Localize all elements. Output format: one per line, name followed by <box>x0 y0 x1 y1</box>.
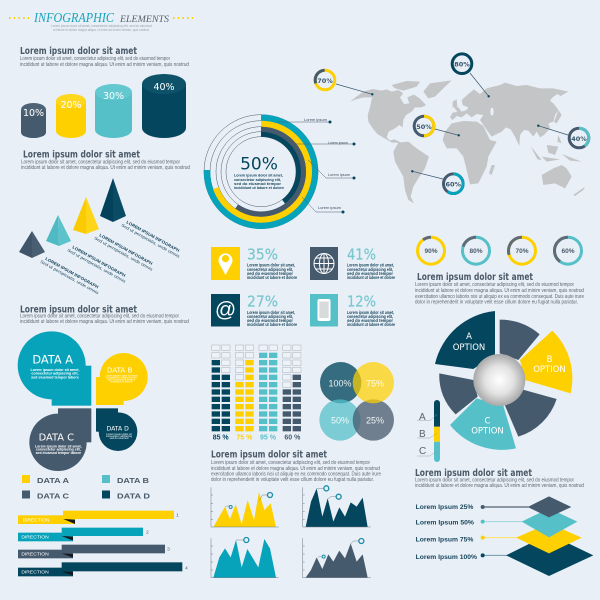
stat tile: phone 12%: 12% <box>347 292 376 310</box>
stat tile: at sign 27%: sed do eiusmod tempor <box>247 318 293 323</box>
radial chart callouts: Lorem ipsum <box>318 206 341 210</box>
stat tile: globe 41%: incididunt ut labore et dolore <box>347 275 396 280</box>
stat tile: at sign 27%: 27% <box>247 292 278 310</box>
text block: layers heading: Lorem ipsum dolor sit amet <box>415 468 532 479</box>
text block: pyramids heading: incididunt ut labore et dolore magna aliqua. Ut enim ad minim veniam, quis nostrud <box>21 165 190 171</box>
bar 4: DIRECTION <box>21 570 49 575</box>
text block: pie heading: dolor in reprehenderit in voluptate velit esse cillum dolore eu fugiat nulla pariatur. <box>415 300 578 306</box>
map pins <box>312 54 589 194</box>
cylinder chart: 40% <box>153 82 175 93</box>
cylinder chart: 30% <box>103 91 124 102</box>
world map <box>350 80 585 203</box>
pin: 40%: 40% <box>571 135 587 143</box>
pin: 80% <box>452 54 472 74</box>
stat tile: globe 41%: sed do eiusmod tempor <box>347 271 393 276</box>
area chart: yellow <box>211 487 279 527</box>
pin: 80%: 80% <box>454 60 470 68</box>
pie legend <box>417 400 440 462</box>
waffle bar chart: 60 % <box>284 435 301 442</box>
segmented pie chart: B <box>547 355 553 365</box>
stat tile: location 35% <box>211 246 298 280</box>
text block: area charts heading: dolor in reprehenderit in voluptate velit esse cillum dolore eu fugiat nulla pariatur. <box>211 477 374 483</box>
text block: area charts heading: Lorem ipsum dolor sit amet, consectetur adipiscing elit, sed do eiusmod tempor <box>211 460 370 466</box>
icon: map pin <box>218 253 232 275</box>
waffle bar chart: 95 % <box>260 435 277 442</box>
bar 2: DIRECTION <box>21 535 49 540</box>
venn diagram: 25% <box>366 416 384 426</box>
bar 2 <box>18 528 149 541</box>
title <box>9 10 193 32</box>
petal: data B <box>96 353 148 405</box>
radial chart callouts: Lorem ipsum <box>328 141 348 145</box>
stat tile: phone 12%: Lorem ipsum dolor sit amet, <box>347 310 394 315</box>
text block: cylinders heading: incididunt ut labore et dolore magna aliqua. Ut enim ad minim veniam, quis nostrud <box>20 62 189 68</box>
waffle bar chart <box>212 345 301 442</box>
data legend: DATA A <box>37 476 70 485</box>
pyramid chart <box>19 178 183 295</box>
text block: cylinders heading: Lorem ipsum dolor sit amet, consectetur adipiscing elit, sed do eiusmod tempor <box>20 56 170 62</box>
text block: data heading: incididunt ut labore et dolore magna aliqua. Ut enim ad minim veniam, quis nostrud <box>20 319 189 325</box>
petal: data A: Lorem ipsum dolor sit amet, <box>31 368 79 372</box>
title: INFOGRAPHIC <box>33 10 115 25</box>
waffle bar chart: 85 % <box>213 435 229 442</box>
area charts <box>211 486 371 578</box>
progress rings: 60% <box>561 248 575 255</box>
petal: data B: incididunt ut labore <box>110 380 133 384</box>
title: ELEMENTS <box>119 15 169 25</box>
text block: pyramids heading: Lorem ipsum dolor sit amet, consectetur adipiscing elit, sed do eiusmod tempor <box>21 160 180 166</box>
title: ut labore et dolore magna aliqua. Ut enim ad minim veniam, quis nostrud <box>53 28 149 32</box>
layered diamonds chart: Lorem Ipsum 75% <box>416 537 474 543</box>
layered diamonds chart <box>416 496 593 576</box>
progress rings: 90% <box>424 248 438 255</box>
stat tile: phone 12%: incididunt ut labore et dolore <box>347 322 396 327</box>
radial chart: sed do eiusmod tempor <box>234 182 282 186</box>
bar 4: 4 <box>185 565 188 571</box>
stat tile: at sign 27%: incididunt ut labore et dolore <box>247 322 298 327</box>
petal: data C <box>29 408 91 471</box>
bar 1: DIRECTION <box>23 518 49 523</box>
stat tile: phone 12%: sed do eiusmod tempor <box>347 318 393 323</box>
petal: data D: Lorem ipsum dolor sit <box>106 432 132 436</box>
progress rings: 70% <box>515 248 529 255</box>
segmented pie chart: OPTION <box>533 365 566 375</box>
pyramid captions: LOREM IPSUM INFOGRAPH <box>99 233 153 266</box>
stat tile: at sign 27%: Lorem ipsum dolor sit amet, <box>247 310 295 315</box>
pin: 70% <box>312 67 338 93</box>
pin: 60%: 60% <box>446 180 462 188</box>
stat tile: location 35%: 35% <box>247 246 278 264</box>
petal: data A <box>18 331 91 406</box>
pin: 70%: 70% <box>317 77 333 85</box>
text block: area charts heading <box>211 450 381 483</box>
segmented pie chart: OPTION <box>453 343 485 353</box>
data legend: DATA B <box>117 476 150 485</box>
text block: area charts heading: Lorem ipsum dolor sit amet <box>211 450 327 460</box>
pyramid captions: Sed ut perspiciatis, unde omnis <box>66 247 127 284</box>
petal: data A: DATA A <box>32 353 73 367</box>
stat tile: globe 41%: 41% <box>347 246 376 264</box>
pyramid captions <box>39 218 183 295</box>
venn diagram: 50% <box>331 416 349 426</box>
pin: 50% <box>414 116 434 136</box>
icon: globe <box>314 254 334 274</box>
data legend: DATA D <box>117 492 151 500</box>
column 95% <box>259 353 277 431</box>
stat tile: location 35%: Lorem ipsum dolor sit amet, <box>247 262 295 268</box>
stat tile: location 35%: consectetur adipiscing elit, <box>247 267 293 272</box>
pyramid captions: Sed ut perspiciatis, unde omnis <box>93 235 154 272</box>
text block: data heading: Lorem ipsum dolor sit amet, consectetur adipiscing elit, sed do eiusmod tempor <box>20 314 179 320</box>
title: Lorem ipsum dolor sit amet, consectetur adipiscing elit, sed do eiusmod <box>51 24 152 28</box>
pyramid captions: LOREM IPSUM INFOGRAPH <box>72 245 126 278</box>
stat tile: globe 41% <box>310 246 396 280</box>
empty cells <box>212 345 301 387</box>
layered diamonds chart: Lorem Ipsum 50% <box>416 520 475 526</box>
radial chart: 50% <box>240 154 278 174</box>
sphere hub <box>473 354 525 406</box>
bar 1 <box>18 511 179 524</box>
bar 4 <box>18 562 188 576</box>
stat tile: location 35%: incididunt ut labore et dolore <box>247 275 298 280</box>
text block: pyramids heading: Lorem ipsum dolor sit amet <box>23 150 140 160</box>
data legend: DATA C <box>37 492 70 500</box>
progress rings <box>412 232 587 270</box>
cylinder chart: 20% <box>60 100 82 111</box>
segmented pie chart: C <box>485 416 491 426</box>
bar 3: 3 <box>167 547 170 553</box>
text block: area charts heading: incididunt ut labore et dolore magna aliqua. Ut enim ad minim veniam, quis nostrud <box>211 466 380 472</box>
pyramid captions: LOREM IPSUM INFOGRAPH <box>45 256 99 289</box>
text block: pyramids heading <box>21 150 190 171</box>
venn diagram <box>319 362 394 441</box>
butterfly diagram <box>18 331 148 471</box>
radial chart callouts: Lorem ipsum <box>304 118 327 122</box>
bar 2: 2 <box>146 530 149 536</box>
segmented pie chart: A <box>466 332 472 342</box>
stat tile: phone 12%: consectetur adipiscing elit, <box>347 314 393 319</box>
pin: 50%: 50% <box>416 123 432 131</box>
petal: data B: sed do eiusmod tempor <box>107 378 135 382</box>
waffle bar chart: 75 % <box>236 435 253 442</box>
venn diagram: 75% <box>366 379 384 389</box>
text block: pie heading: exercitation ullamco laboris nisi ut aliquip ex ea commodo consequat. Duis aute irure <box>415 294 584 300</box>
petal: data D: consectetur adipiscing <box>106 434 133 438</box>
segmented pie chart <box>435 311 572 450</box>
pyramid captions: Sed ut perspiciatis, unde omnis <box>120 222 181 259</box>
petal: data C: Lorem ipsum dolor sit amet, <box>35 444 82 448</box>
petal: data A: sed eiusmod tempor labore <box>31 376 79 380</box>
connector lines <box>483 507 528 555</box>
pie legend: C <box>419 446 426 457</box>
radial chart: Lorem ipsum dolor sit amet, <box>234 174 283 178</box>
data legend <box>22 475 151 500</box>
text block: data heading <box>20 304 189 325</box>
cylinder chart <box>21 74 186 138</box>
petal: data B: consectetur adipiscing elit <box>106 376 137 380</box>
petal: data D: DATA D <box>106 426 129 433</box>
area chart: blue <box>211 537 279 578</box>
petal: data D: sed do eiusmod <box>110 436 129 440</box>
petal: data C: DATA C <box>39 433 74 444</box>
text block: pie heading: Lorem ipsum dolor sit amet <box>417 272 533 283</box>
progress rings: 80% <box>469 248 483 255</box>
stat tile: at sign 27%: consectetur adipiscing elit, <box>247 314 293 319</box>
text block: cylinders heading: Lorem ipsum dolor sit amet <box>20 46 137 57</box>
cylinder chart: 10% <box>23 108 44 119</box>
pin: 40% <box>569 128 589 148</box>
radial chart: incididunt ut labore et dolore <box>234 186 284 190</box>
radial chart: consectetur adipiscing elit, <box>234 178 281 182</box>
icon: phone <box>318 299 330 321</box>
pyramid captions: Sed ut perspiciatis, unde omnis <box>39 259 100 295</box>
pyramid captions: LOREM IPSUM INFOGRAPH <box>126 220 180 253</box>
text block: area charts heading: exercitation ullamco laboris nisi ut aliquip ex ea commodo consequat. Duis aute irure <box>211 472 381 478</box>
column 85% <box>212 360 230 431</box>
pie legend: A <box>419 412 426 423</box>
text block: pie heading: Lorem ipsum dolor sit amet, consectetur adipiscing elit, sed do eiusmod tempor <box>415 282 574 288</box>
pin: 60% <box>444 174 463 194</box>
stat tile: location 35%: sed do eiusmod tempor <box>247 271 293 276</box>
petal: data C: consectetur adipiscing elit, <box>36 448 81 452</box>
pie legend: B <box>419 429 426 440</box>
text block: layers heading: Lorem ipsum dolor sit amet, consectetur adipiscing elit, sed do eiusmod tempor <box>415 478 574 484</box>
petal: data B: Lorem ipsum dolor sit amet <box>105 374 138 378</box>
stat tile: globe 41%: Lorem ipsum dolor sit amet, <box>347 262 394 268</box>
text block: layers heading <box>415 468 584 489</box>
area chart: slate <box>303 538 371 578</box>
bar 1: 1 <box>176 513 179 519</box>
petal: data D <box>96 408 137 451</box>
petal: data C: sed eiusmod tempor labore <box>36 451 81 455</box>
column 75% <box>235 360 254 431</box>
radial chart <box>204 115 356 229</box>
layered diamonds chart: Lorem Ipsum 100% <box>416 555 478 561</box>
direction bars <box>18 511 188 576</box>
petal: data A: consectetur adipiscing elit, <box>31 372 79 376</box>
stat tile: globe 41%: consectetur adipiscing elit, <box>347 267 393 272</box>
text block: pie heading: incididunt ut labore et dolore magna aliqua. Ut enim ad minim veniam, quis nostrud <box>415 288 584 294</box>
layered diamonds chart: Lorem Ipsum 25% <box>416 505 474 511</box>
stat tile: at sign 27% <box>211 292 298 327</box>
radial chart callouts: Lorem ipsum <box>328 173 350 177</box>
bar 3: DIRECTION <box>21 552 49 557</box>
text block: cylinders heading <box>20 46 189 68</box>
bar 3 <box>18 545 170 558</box>
text block: layers heading: incididunt ut labore et dolore magna aliqua. Ut enim ad minim veniam, quis nostrud <box>415 483 584 489</box>
radial chart callouts <box>277 118 356 214</box>
area chart: dark teal <box>303 486 371 527</box>
stat tile: phone 12% <box>310 292 396 327</box>
icon: at sign: @ <box>215 298 236 322</box>
text block: data heading: Lorem ipsum dolor sit amet <box>20 304 137 316</box>
petal: data B: DATA B <box>107 366 132 375</box>
column 60% <box>283 375 301 431</box>
text block: pie heading <box>415 272 584 306</box>
venn diagram: 100% <box>329 379 351 389</box>
segmented pie chart: OPTION <box>471 426 504 436</box>
